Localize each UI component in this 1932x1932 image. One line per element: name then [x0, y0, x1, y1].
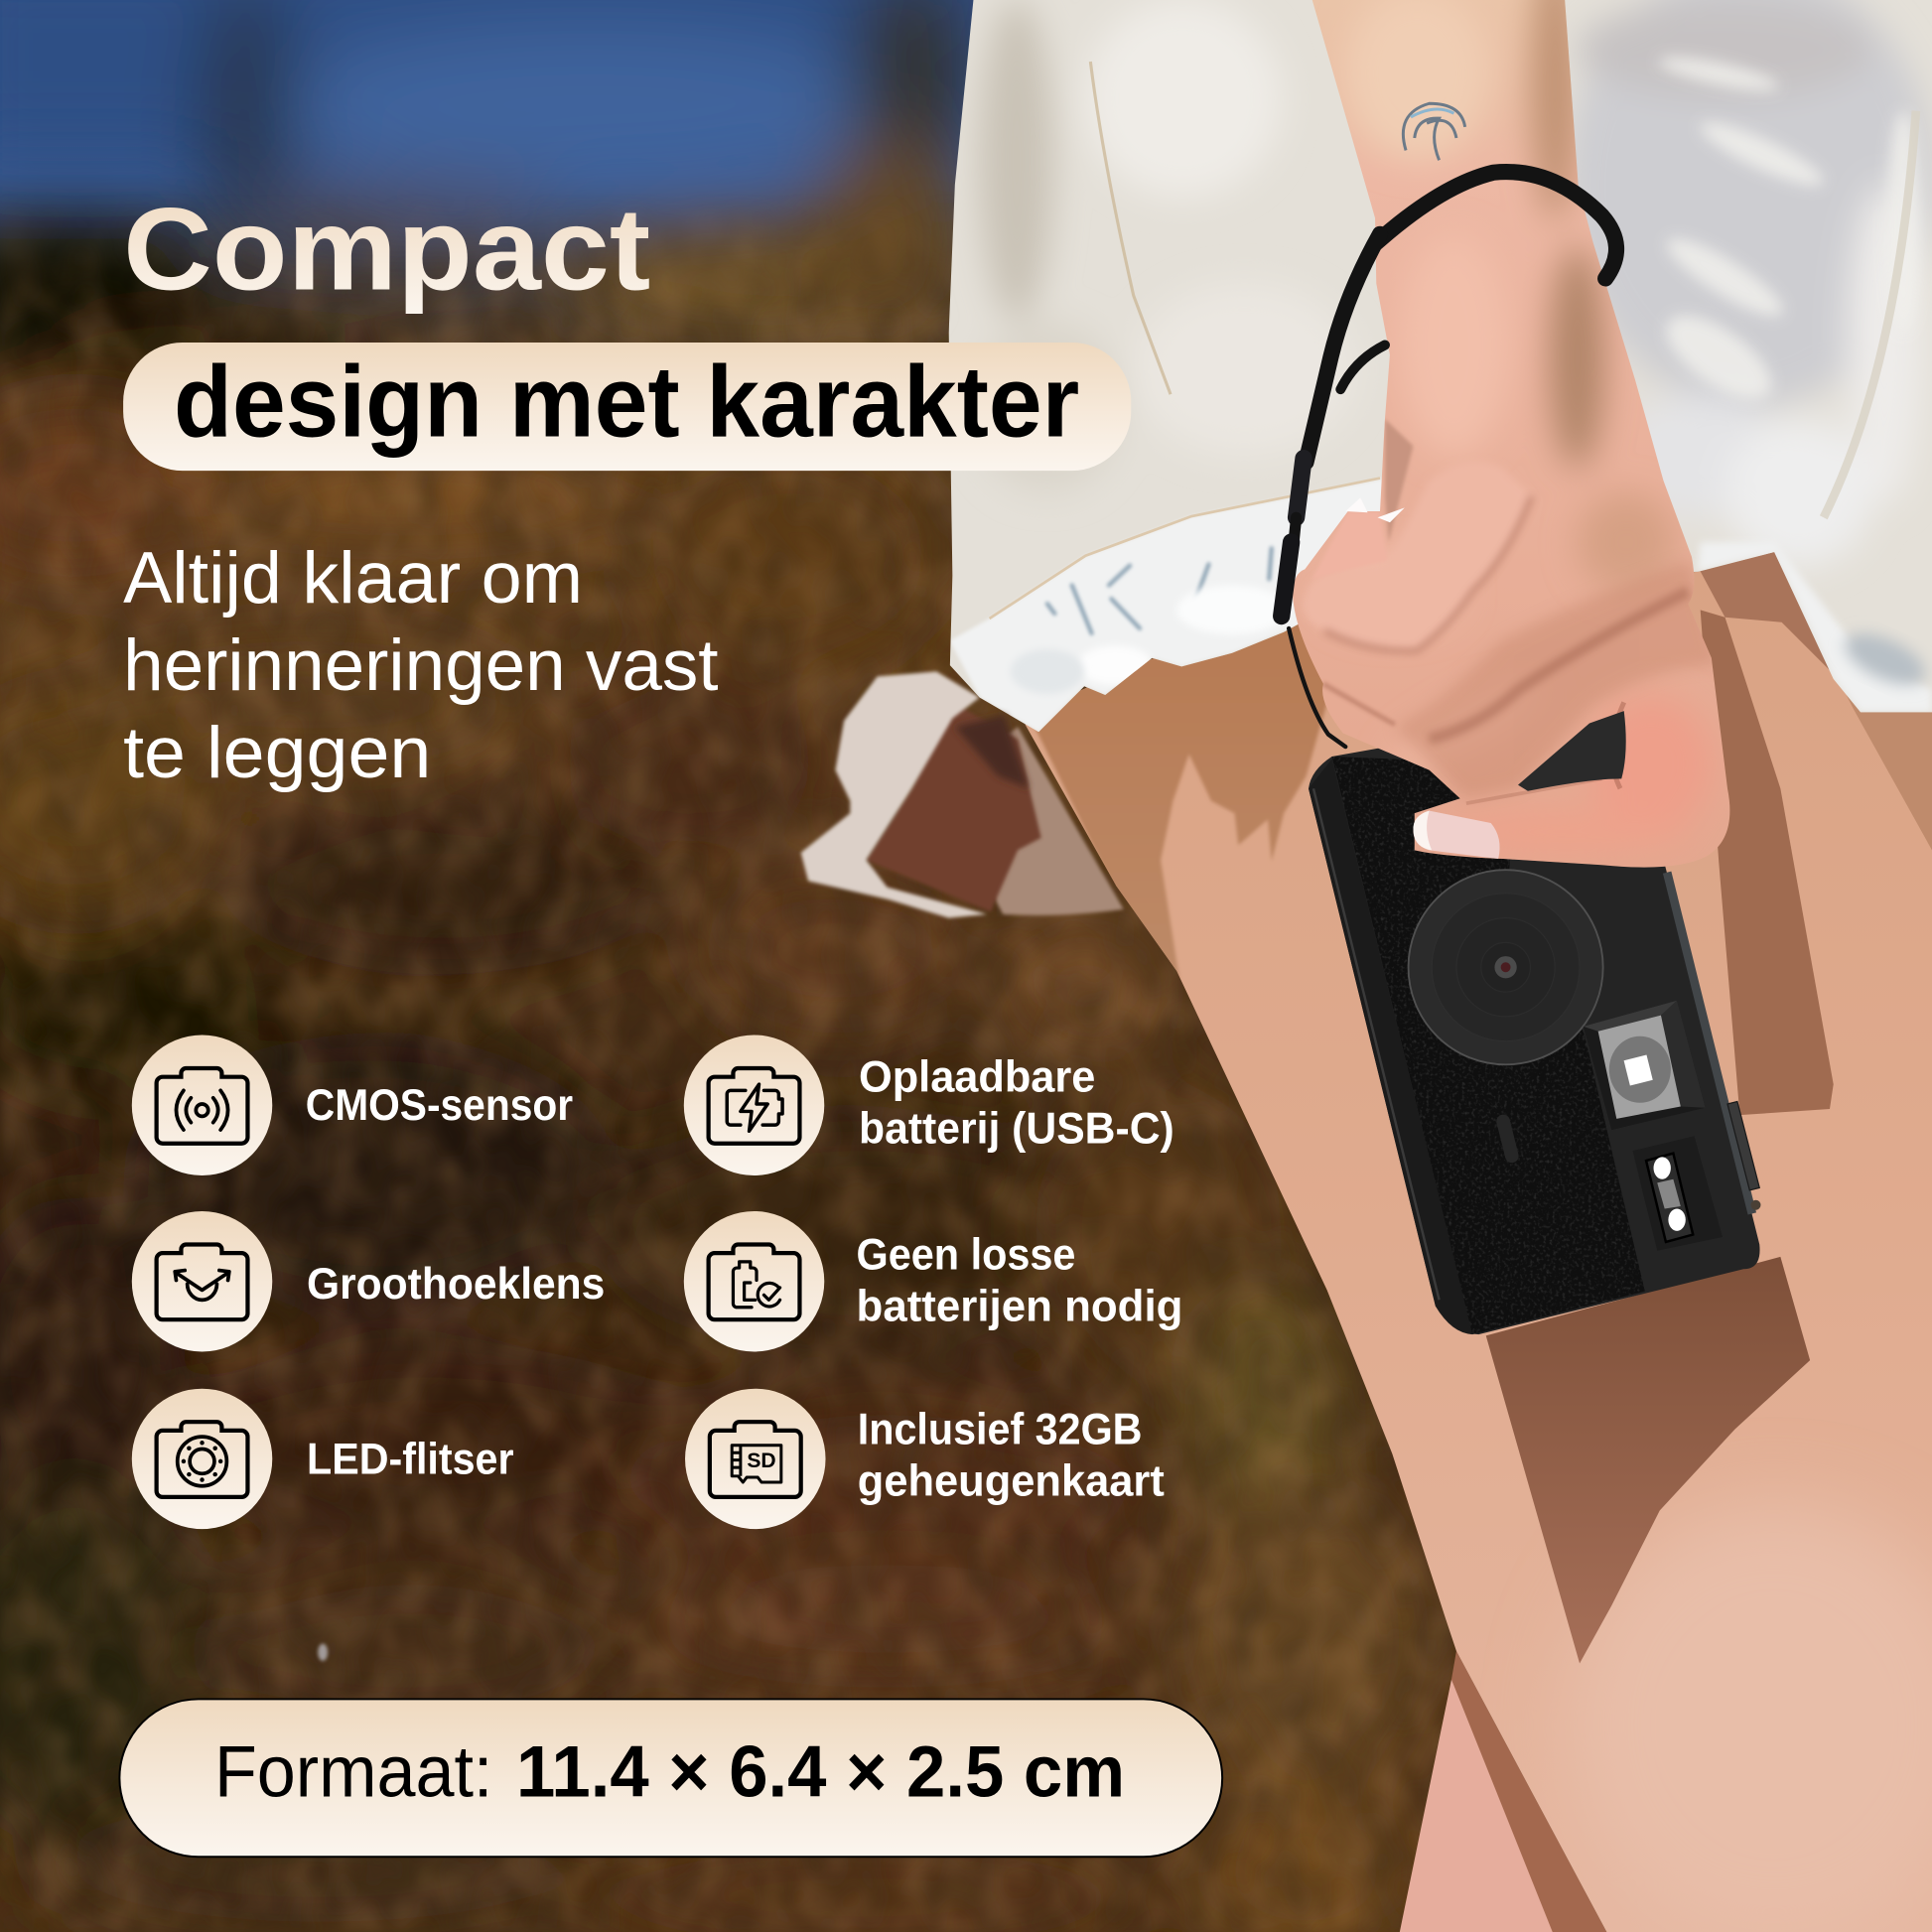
heading pill: design met karakter [174, 345, 1079, 458]
subtitle text: Altijd klaar om [123, 537, 583, 619]
icon: camera with wide-angle lens [132, 1211, 272, 1351]
photo: camera body [1309, 705, 1760, 1343]
subtitle text [123, 537, 719, 793]
icon: camera with LED ring [132, 1389, 272, 1529]
feature: Groothoeklens: Groothoeklens [307, 1260, 605, 1309]
photo: wrist tattoo [1403, 103, 1465, 160]
photo: fingernail [1413, 811, 1500, 859]
icon: camera flash [1584, 1001, 1706, 1130]
icon: camera viewfinder [1632, 1136, 1723, 1251]
size pill [119, 1699, 1222, 1857]
icon: camera with sensor [132, 1035, 272, 1175]
photo: frayed shorts pocket lining [801, 671, 1124, 918]
feature: Oplaadbare batterij: Oplaadbare [859, 1053, 1095, 1102]
icon: camera with battery check [684, 1211, 824, 1351]
size pill: 11.4 × 6.4 × 2.5 cm [516, 1730, 1125, 1812]
icon: camera with charging battery [684, 1035, 824, 1175]
icon: camera with SD card [685, 1389, 826, 1529]
icon: camera with SD card: SD [747, 1449, 776, 1472]
photo: camera top visible through the grip [1518, 711, 1626, 791]
feature: CMOS-sensor: CMOS-sensor [306, 1081, 573, 1130]
feature: Geen losse batterijen [684, 1211, 1182, 1351]
icon: camera lens [1409, 870, 1603, 1064]
feature: Geen losse batterijen: Geen losse [857, 1230, 1075, 1279]
subtitle text: herinneringen vast [123, 624, 719, 706]
size pill: Formaat: [214, 1730, 492, 1812]
feature: Oplaadbare batterij [684, 1035, 1174, 1175]
icon: camera microphone slot [1495, 1113, 1520, 1165]
feature: LED-flitser [132, 1389, 514, 1529]
background photo: blurred field and sky [0, 0, 1531, 1932]
photo: frayed shorts hem ruffle [950, 479, 1386, 732]
feature: Inclusief 32GB geheugenkaart: geheugenkaart [858, 1457, 1165, 1506]
feature: Geen losse batterijen: batterijen nodig [857, 1282, 1182, 1330]
photo: fingers and knuckle shading [1303, 419, 1719, 803]
feature: CMOS-sensor [132, 1035, 573, 1175]
feature: Groothoeklens [132, 1211, 605, 1351]
photo: wrist strap [1282, 172, 1616, 747]
photo: other leg behind [1400, 690, 1932, 1932]
feature: LED-flitser: LED-flitser [307, 1435, 514, 1483]
photo: hand and arm [1293, 0, 1729, 868]
feature: Inclusief 32GB geheugenkaart: Inclusief 32GB [858, 1406, 1142, 1454]
feature: Oplaadbare batterij: batterij (USB-C) [859, 1105, 1174, 1154]
feature: Inclusief 32GB geheugenkaart [685, 1389, 1165, 1529]
icon: camera dial [1727, 1102, 1760, 1210]
subtitle text: te leggen [123, 712, 431, 793]
photo: thigh with hand and camera shadows [986, 492, 1932, 1932]
title: Compact: Compact [123, 184, 650, 315]
photo: denim shorts [936, 0, 1932, 740]
